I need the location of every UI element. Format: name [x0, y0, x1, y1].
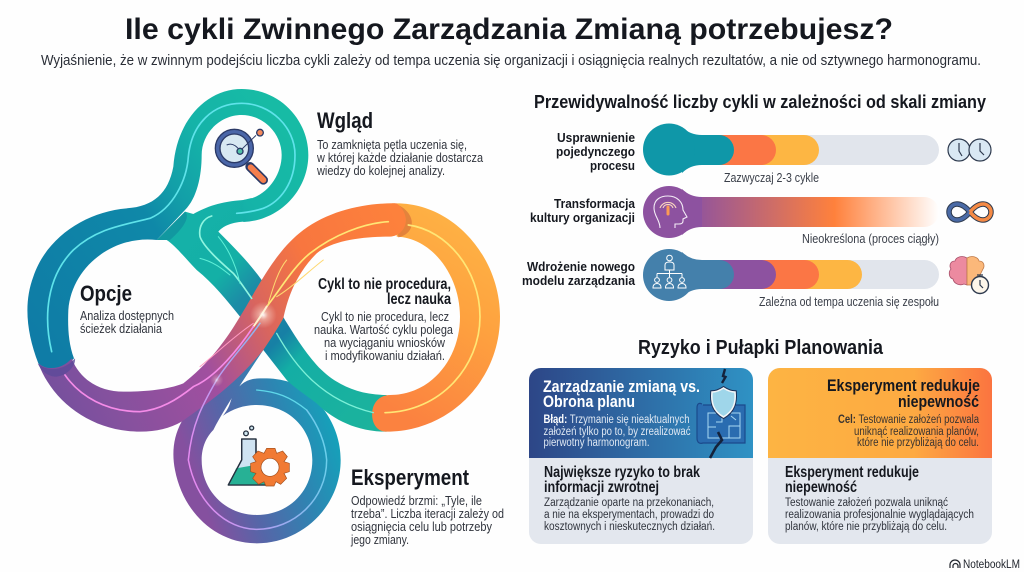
- card body: Zarządzanie oparte na przekonaniach,: [544, 497, 714, 509]
- text: Cykl to nie procedura: lecz nauka: [387, 291, 451, 308]
- bottom loop ribbon: [173, 350, 341, 543]
- card body: informacji zwrotnej: [544, 479, 659, 496]
- card body: niepewność: [785, 479, 857, 496]
- orange right arc ribbon: [372, 203, 500, 432]
- card: change management vs plan defence: [529, 368, 753, 544]
- glow lines: [48, 103, 480, 529]
- card body: kosztownych i nieskutecznych działań.: [544, 521, 715, 533]
- icon: magnifying glass: [215, 129, 263, 180]
- card body: planów, które nie przybliżają do celu.: [785, 521, 947, 533]
- row: new management model: modelu zarządzania: [522, 273, 636, 288]
- icon: shield and blueprint: [697, 369, 745, 458]
- header text: Eksperyment redukuje: [827, 376, 980, 395]
- text: Cykl to nie procedura: [314, 276, 453, 363]
- left seam: [38, 358, 75, 377]
- title: Ile cykli Zwinnego Zarządzania Zmianą potrzebujesz?: [125, 13, 893, 46]
- header text: Cel: Testowanie założeń pozwala: [838, 414, 979, 426]
- junction seam: [157, 212, 187, 240]
- card body: Eksperyment redukuje: [785, 464, 919, 481]
- purple to orange band: [38, 203, 406, 432]
- icon: two clocks: [948, 139, 991, 161]
- text: Wgląd: Wgląd: [317, 108, 373, 133]
- text: Eksperyment: trzeba”. Liczba iteracji zależy od: [351, 507, 504, 521]
- panel: risks heading: Ryzyko i Pułapki Planowania: [638, 337, 884, 359]
- header text: [827, 376, 980, 449]
- text: Cykl to nie procedura: i modyfikowaniu działań.: [325, 349, 445, 363]
- text: Wgląd: To zamknięta pętla uczenia się,: [317, 138, 467, 152]
- text: Eksperyment: osiągnięcia celu lub potrzeby: [351, 520, 493, 534]
- header text: niepewność: [898, 392, 979, 411]
- row: single process: Zazwyczaj 2-3 cykle: [724, 171, 819, 185]
- row: single process: procesu: [590, 158, 635, 173]
- text: Opcje: Analiza dostępnych: [80, 309, 174, 323]
- header text: uniknąć realizowania planów,: [854, 426, 979, 438]
- text: Cykl to nie procedura: Cykl to nie procedura,: [318, 276, 451, 293]
- row: new management model: [522, 249, 939, 309]
- text: Eksperyment: jego zmiany.: [350, 533, 409, 547]
- card: change management vs plan defence: pierwotny harmonogram.: [544, 437, 650, 449]
- icon: flask and gear: [228, 426, 289, 486]
- card: change management vs plan defence: Obrona planu: [543, 392, 635, 411]
- teal diagonal ribbon: [157, 198, 387, 432]
- card body: Największe ryzyko to brak: [544, 464, 700, 481]
- seam shadow: [392, 203, 412, 237]
- header text: które nie przybliżają do celu.: [857, 437, 979, 449]
- text: Cykl to nie procedura: Cykl to nie procedura, lecz: [321, 310, 449, 324]
- text: Wgląd: w której każde działanie dostarcza: [316, 151, 483, 165]
- card body: [785, 464, 974, 533]
- row: new management model: Zależna od tempa uczenia się zespołu: [759, 295, 939, 309]
- row: new management model: Wdrożenie nowego: [527, 259, 635, 274]
- card: change management vs plan defence: Zarządzanie zmianą vs.: [543, 377, 700, 396]
- text: Cykl to nie procedura: nauka. Wartość cyklu polega: [314, 323, 453, 337]
- infinity loop diagram: [27, 89, 500, 543]
- row: single process: Usprawnienie: [557, 130, 635, 145]
- row: single process: [556, 124, 939, 185]
- text: Cykl to nie procedura: na wyciąganiu wniosków: [324, 336, 446, 350]
- text: Opcje: Opcje: [80, 281, 132, 306]
- blue and teal upper loop ribbon: [27, 89, 308, 369]
- card: experiment reduces uncertainty: [768, 368, 992, 544]
- card body: Testowanie założeń pozwala uniknąć: [785, 497, 948, 509]
- card body: a nie na eksperymentach, prowadzi do: [544, 509, 714, 521]
- row: single process: pojedynczego: [556, 144, 635, 159]
- row: culture transformation: Nieokreślona (proces ciągły): [802, 232, 939, 246]
- row: culture transformation: kultury organizacji: [530, 210, 635, 225]
- text: Eksperyment: Odpowiedź brzmi: „Tyle, ile: [351, 494, 482, 508]
- text: Wgląd: wiedzy do kolejnej analizy.: [316, 164, 445, 178]
- text: Opcje: ścieżek działania: [80, 322, 162, 336]
- icon: infinity: [949, 204, 991, 220]
- text: Opcje: [80, 281, 174, 336]
- text: Wgląd: [316, 108, 483, 178]
- panel: predictability chart: [522, 91, 991, 309]
- row: culture transformation: Transformacja: [554, 196, 636, 211]
- text: Eksperyment: [350, 465, 504, 547]
- text: Eksperyment: Eksperyment: [351, 465, 470, 490]
- card: change management vs plan defence: założeń tylko po to, by zrealizować: [544, 426, 691, 438]
- card body: [544, 464, 715, 533]
- card header: [529, 368, 753, 458]
- card body: realizowania profesjonalnie wyglądających: [785, 509, 974, 521]
- card: change management vs plan defence: Błąd: Trzymanie się nieaktualnych: [544, 414, 690, 426]
- icon: brain with stopwatch: [949, 257, 988, 294]
- card header: [768, 368, 992, 458]
- row: culture transformation: [530, 186, 939, 246]
